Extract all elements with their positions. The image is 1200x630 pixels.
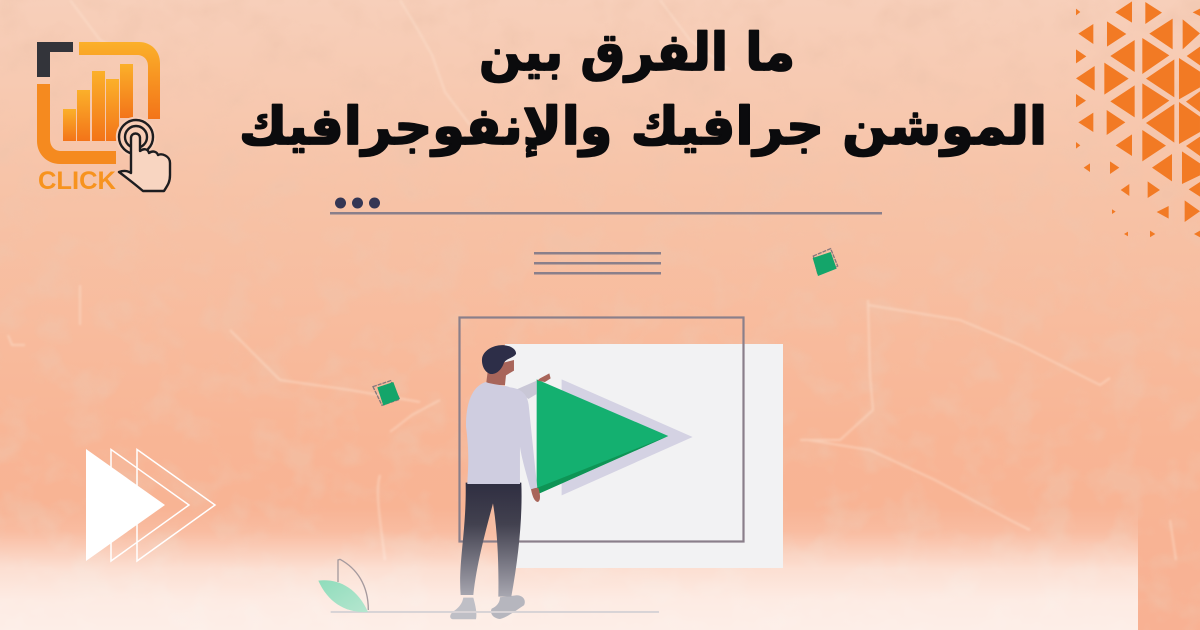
hair [482, 345, 516, 374]
shoes [450, 598, 476, 619]
ground line [331, 611, 659, 613]
logo orange frame [79, 42, 160, 119]
logo click word: CLICK [38, 167, 116, 195]
logo dark corner [37, 42, 73, 77]
torso [466, 382, 537, 489]
green cube left [373, 381, 400, 406]
person [450, 345, 551, 619]
video player white panel [505, 344, 783, 568]
logo: Click [37, 42, 170, 195]
title line 1: ما الفرق بين [479, 23, 795, 83]
arrow outline 3 [137, 450, 215, 561]
play triangle shadow [562, 379, 693, 495]
arrow outline 2 [111, 450, 189, 561]
illustration [318, 345, 693, 619]
plant [318, 559, 368, 612]
logo bars [63, 64, 133, 141]
play triangle [537, 379, 668, 495]
play arrows bottom left [86, 449, 215, 561]
raised arm [517, 381, 537, 399]
triangle pattern [1076, 1, 1200, 237]
hand lower [531, 487, 540, 502]
text placeholder lines [534, 252, 661, 274]
green cube top right [813, 249, 838, 276]
legs [460, 483, 522, 597]
title [239, 23, 1047, 157]
decorative header: dots and rule [330, 198, 882, 214]
arrow solid [86, 449, 165, 561]
video frame outline [460, 318, 744, 542]
title line 2: الموشن جرافيك والإنفوجرافيك [239, 97, 1047, 157]
neck and face [486, 360, 514, 385]
bottom white fade [0, 507, 1138, 630]
logo hand icon [117, 118, 170, 191]
